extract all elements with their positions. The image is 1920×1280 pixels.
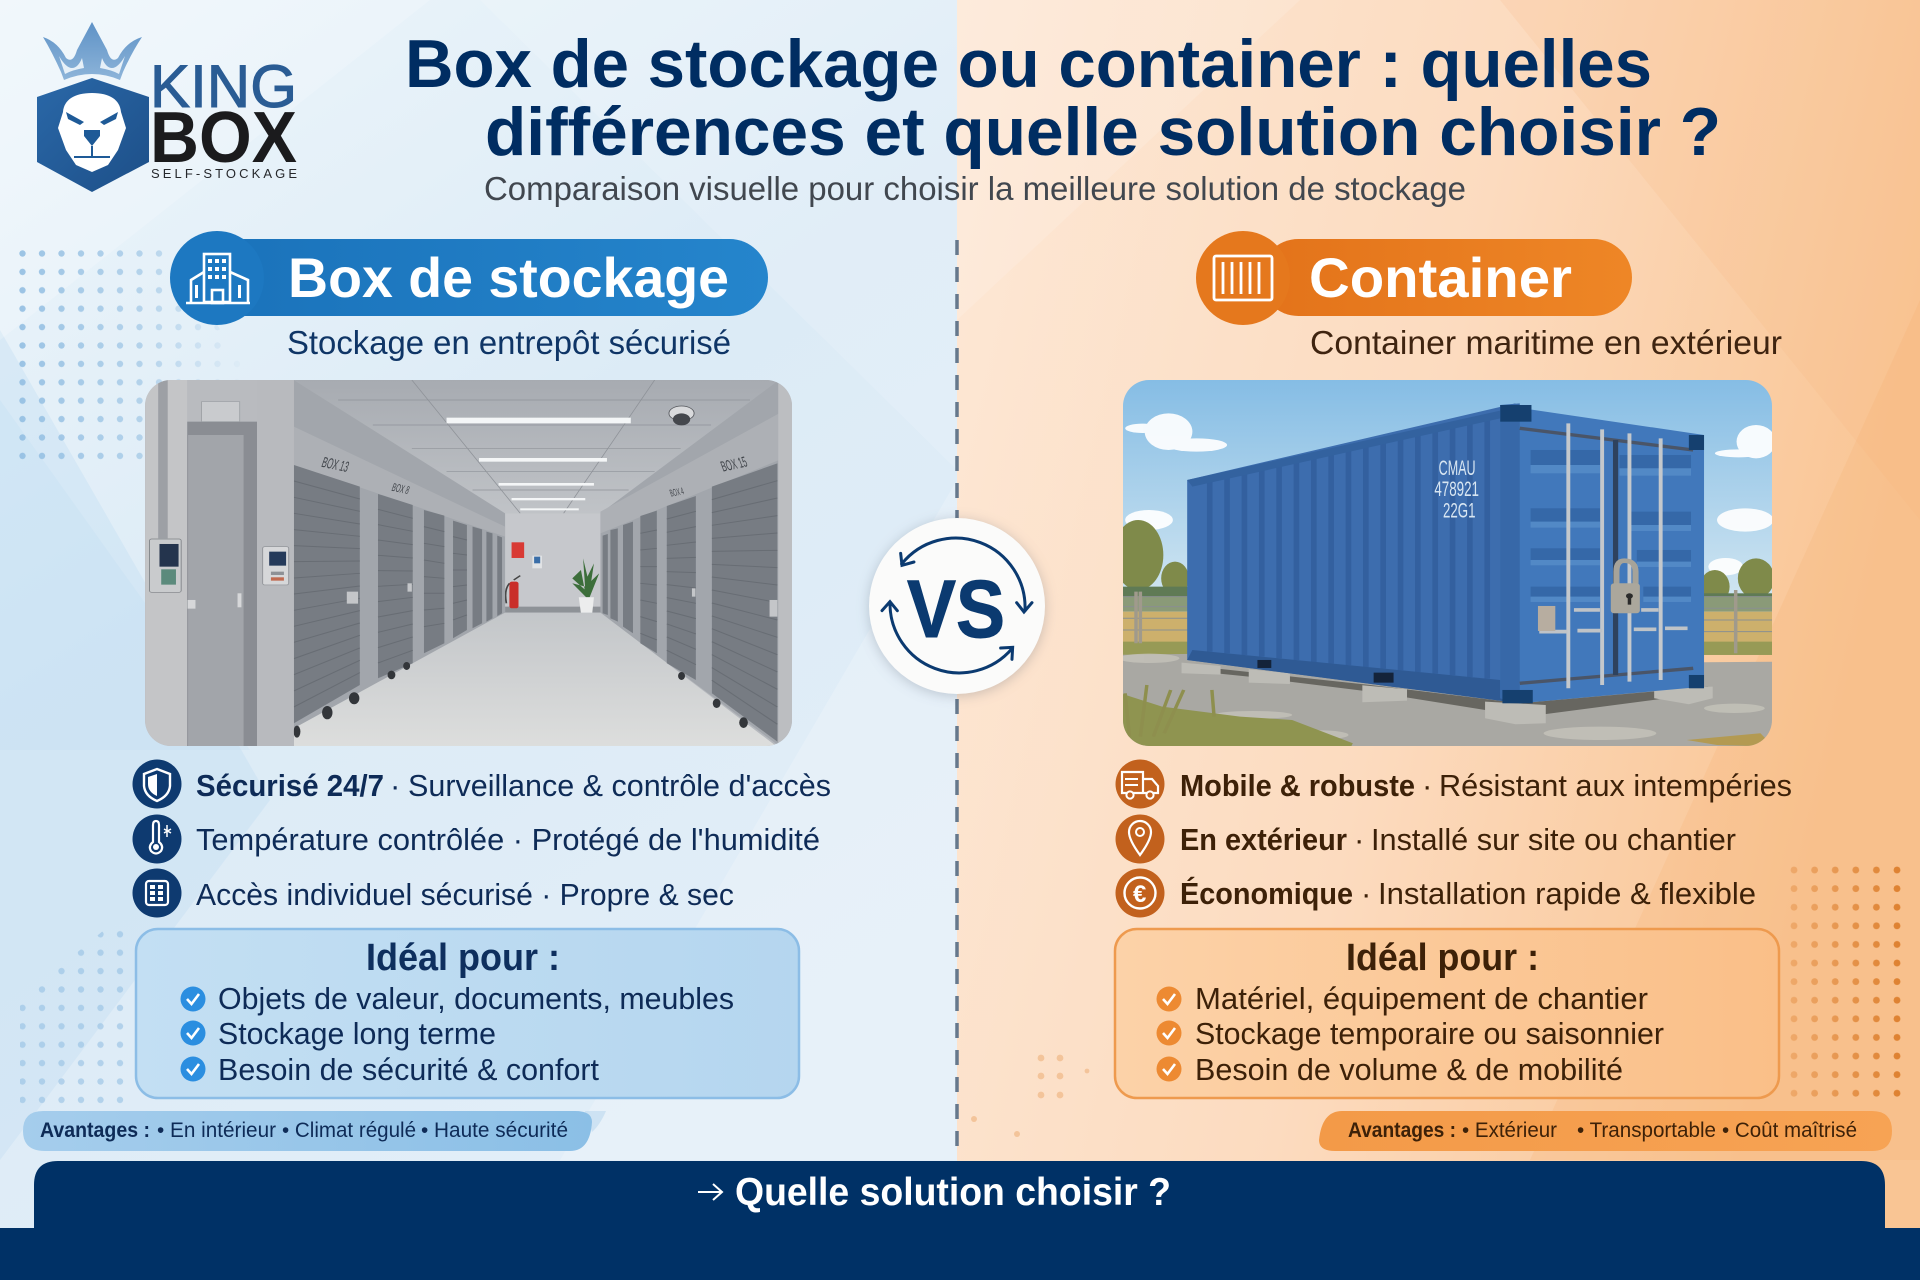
security camera <box>669 406 694 425</box>
clouds <box>1125 413 1776 575</box>
logo wordmark BOX: BOX <box>150 98 297 178</box>
ceiling <box>294 380 780 513</box>
panel: idéal pour box <box>136 929 799 1098</box>
wire fence <box>1123 590 1773 653</box>
decorative dot pattern: bottom left <box>20 931 124 1104</box>
icon: euro: € <box>1133 881 1146 908</box>
dashed center divider <box>955 240 959 1156</box>
trees <box>1113 520 1774 603</box>
list item 1: Matériel, équipement de chantier <box>1195 981 1648 1016</box>
roller doors right <box>603 463 777 742</box>
icon: shield <box>132 760 182 808</box>
feature: économique <box>1116 868 1756 918</box>
container front doors <box>1500 403 1704 703</box>
title: Box de stockage ou container : quelles <box>405 26 1652 102</box>
decorative dot group: bottom centre right <box>971 1055 1089 1137</box>
header pill <box>200 239 768 316</box>
heading: idéal pour: Idéal pour : <box>366 937 560 979</box>
decorative dot pattern: top left <box>19 250 220 460</box>
concrete blocks <box>1182 663 1713 724</box>
container side with corrugation: 478921 <box>1434 478 1479 501</box>
container side with corrugation <box>1187 403 1520 703</box>
padlock <box>1611 561 1640 613</box>
label bands above doors: BOX 4 <box>668 486 686 499</box>
container ID marking: 22G1 <box>1443 499 1476 522</box>
floor <box>294 613 779 748</box>
feature: sécurisé: Surveillance & contrôle d'accès <box>408 768 831 803</box>
list item 2: Stockage temporaire ou saisonnier <box>1195 1016 1664 1051</box>
icon: keypad <box>132 868 182 918</box>
VS badge <box>869 518 1045 694</box>
label bands above doors: BOX 15 <box>719 454 749 475</box>
panel: container header <box>1196 231 1632 325</box>
container side with corrugation: CMAU <box>1439 457 1476 480</box>
far wall with fire safety equipment and plant <box>505 513 600 613</box>
bottom banner <box>0 1161 1920 1280</box>
icon: building <box>170 231 264 325</box>
features: container <box>1116 760 1792 918</box>
feature: extérieur: Installé sur site ou chantier <box>1371 822 1736 857</box>
label bands above doors <box>294 413 779 537</box>
panel: idéal pour container <box>1115 929 1779 1098</box>
feature: extérieur <box>1116 814 1736 864</box>
avantages: container <box>1319 1111 1892 1151</box>
avantages: container: • Coût maîtrisé <box>1722 1119 1857 1142</box>
exchange arrows <box>882 538 1032 673</box>
container ID marking <box>1434 460 1478 518</box>
feature: extérieur: · <box>1354 822 1364 857</box>
list item 3: Besoin de volume & de mobilité <box>1195 1052 1623 1087</box>
panel subtitle: entrepôt: Stockage en entrepôt sécurisé <box>287 324 731 361</box>
door wheels and latches <box>293 583 777 738</box>
panel subtitle: maritime: Container maritime en extérieur <box>1310 324 1782 361</box>
label bands above doors: BOX 13 <box>320 454 351 475</box>
avantages: box: • Climat régulé <box>282 1119 416 1142</box>
image: storage corridor <box>145 380 792 746</box>
feature: économique: · <box>1361 876 1371 911</box>
logo wordmark KING: KING <box>150 53 297 120</box>
icon: crown <box>43 22 142 80</box>
icon: thermometer <box>132 814 182 864</box>
title: différences et quelle solution choisir ? <box>485 94 1721 170</box>
icon: truck <box>1116 760 1164 808</box>
logo: King Box self-stockage <box>37 22 297 192</box>
field <box>1110 597 1790 612</box>
decorative dot pattern: bottom right <box>1790 866 1900 1097</box>
avantages: box: Avantages : <box>40 1119 150 1142</box>
feature: mobile: · <box>1422 768 1432 803</box>
access keypads <box>150 539 289 592</box>
feature: extérieur: En extérieur <box>1180 822 1347 857</box>
feature: sécurisé: · <box>390 768 400 803</box>
feature: accès: Accès individuel sécurisé · Propre & sec <box>196 877 734 912</box>
icon: euro <box>1116 868 1164 918</box>
avantages: container: • Extérieur <box>1462 1119 1557 1142</box>
grass tufts <box>1123 684 1765 746</box>
feature: sécurisé <box>132 760 831 808</box>
feature: mobile <box>1116 760 1792 808</box>
heading: Box de stockage: Box de stockage <box>288 246 729 309</box>
feature: température <box>132 814 820 864</box>
list item 3: Besoin de sécurité & confort <box>218 1052 599 1087</box>
panel: box de stockage header <box>170 231 768 325</box>
image: shipping container outdoors <box>1123 380 1772 746</box>
call to action text: Quelle solution choisir ? <box>735 1171 1171 1214</box>
title <box>405 26 1721 170</box>
avantages: box <box>23 1111 606 1151</box>
feature: température: Température contrôlée · Protégé de l'humidité <box>196 822 820 857</box>
heading: Container: Container <box>1309 246 1572 309</box>
avantages: container: Avantages : <box>1348 1119 1456 1142</box>
arrow <box>698 1184 722 1200</box>
right wall <box>600 380 779 746</box>
avantages: box: • Haute sécurité <box>421 1119 568 1142</box>
header pill <box>1260 239 1632 316</box>
feature: économique: Économique <box>1180 876 1353 911</box>
feature: sécurisé: Sécurisé 24/7 <box>196 768 384 803</box>
icon: shipping container <box>1196 231 1290 325</box>
heading: idéal pour: Idéal pour : <box>1346 937 1539 979</box>
feature: accès <box>132 868 734 918</box>
avantages: box: • En intérieur <box>157 1119 276 1142</box>
background: left blue half <box>0 0 957 1280</box>
left wall <box>294 380 505 746</box>
gravel ground <box>1123 654 1772 746</box>
feature: mobile: Mobile & robuste <box>1180 768 1415 803</box>
background: right orange half <box>957 0 1920 1280</box>
feature: mobile: Résistant aux intempéries <box>1439 768 1792 803</box>
feature: économique: Installation rapide & flexible <box>1378 876 1756 911</box>
VS text: VS <box>907 564 1005 655</box>
list item 2: Stockage long terme <box>218 1016 496 1051</box>
label bands above doors: BOX 8 <box>390 481 411 497</box>
icon: hexagon with lion <box>37 78 149 192</box>
left front column, door and pipe <box>145 380 294 747</box>
list item 1: Objets de valeur, documents, meubles <box>218 981 734 1016</box>
features: box de stockage <box>132 760 831 918</box>
avantages: container: • Transportable <box>1577 1119 1716 1142</box>
icon: map pin <box>1116 814 1164 864</box>
roller doors left <box>294 465 502 723</box>
subtitle: Comparaison visuelle pour choisir la meilleure solution de stockage <box>484 170 1466 207</box>
logo tagline: SELF-STOCKAGE <box>151 166 297 181</box>
